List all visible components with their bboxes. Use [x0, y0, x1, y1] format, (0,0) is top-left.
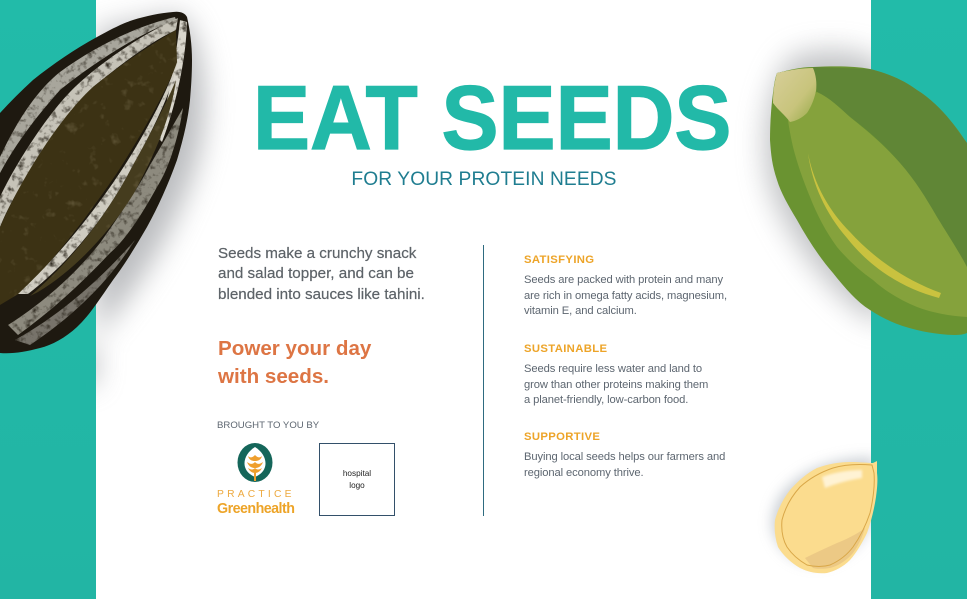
logo: Practice Greenhealth: PRACTICE [217, 489, 295, 500]
sponsor label: BROUGHT TO YOU BY [217, 420, 319, 431]
benefit: sustainable [524, 343, 708, 406]
benefit: supportive [524, 431, 725, 479]
heading: supportive: SUPPORTIVE [524, 431, 600, 443]
hospital logo placeholder: hospital [343, 468, 371, 478]
text: satisfying [524, 274, 727, 317]
text: supportive [524, 451, 725, 479]
subtitle: FOR YOUR PROTEIN NEEDS [351, 169, 617, 190]
text: supportive: Buying local seeds helps our farmers and [524, 451, 725, 463]
text: sustainable: grow than other proteins making them [524, 379, 708, 391]
seed bands [0, 17, 187, 345]
heading: satisfying: SATISFYING [524, 254, 594, 266]
hospital logo placeholder [319, 443, 395, 516]
text: sustainable: a planet-friendly, low-carbon food. [524, 394, 688, 406]
text: sustainable: Seeds require less water and land to [524, 363, 702, 375]
callout [218, 337, 372, 388]
intro text: blended into sauces like tahini. [218, 286, 425, 303]
bright stripe [18, 56, 179, 294]
title: EAT SEEDS [253, 68, 731, 169]
text: satisfying: vitamin E, and calcium. [524, 305, 637, 317]
logo: Practice Greenhealth: Greenhealth [217, 501, 294, 517]
heading: sustainable: SUSTAINABLE [524, 343, 607, 355]
text: satisfying: are rich in omega fatty acids, magnesium, [524, 290, 727, 302]
icon: pale seed [775, 461, 877, 573]
benefit: satisfying [524, 254, 727, 317]
icon: sunflower seed [0, 0, 200, 360]
icon: pumpkin seed [770, 66, 967, 335]
callout: Power your day [218, 337, 371, 360]
logo: Practice Greenhealth [217, 443, 295, 517]
intro text: Seeds make a crunchy snack [218, 245, 416, 262]
brown kernel [0, 30, 177, 305]
intro text [218, 245, 425, 303]
text: sustainable [524, 363, 708, 406]
callout: with seeds. [218, 365, 329, 388]
divider [483, 245, 484, 516]
intro text: and salad topper, and can be [218, 265, 414, 282]
seed cap [773, 68, 816, 122]
text: satisfying: Seeds are packed with protein and many [524, 274, 723, 286]
yellow streak [808, 153, 941, 298]
text: supportive: regional economy thrive. [524, 467, 643, 479]
hospital logo placeholder: logo [349, 480, 365, 490]
